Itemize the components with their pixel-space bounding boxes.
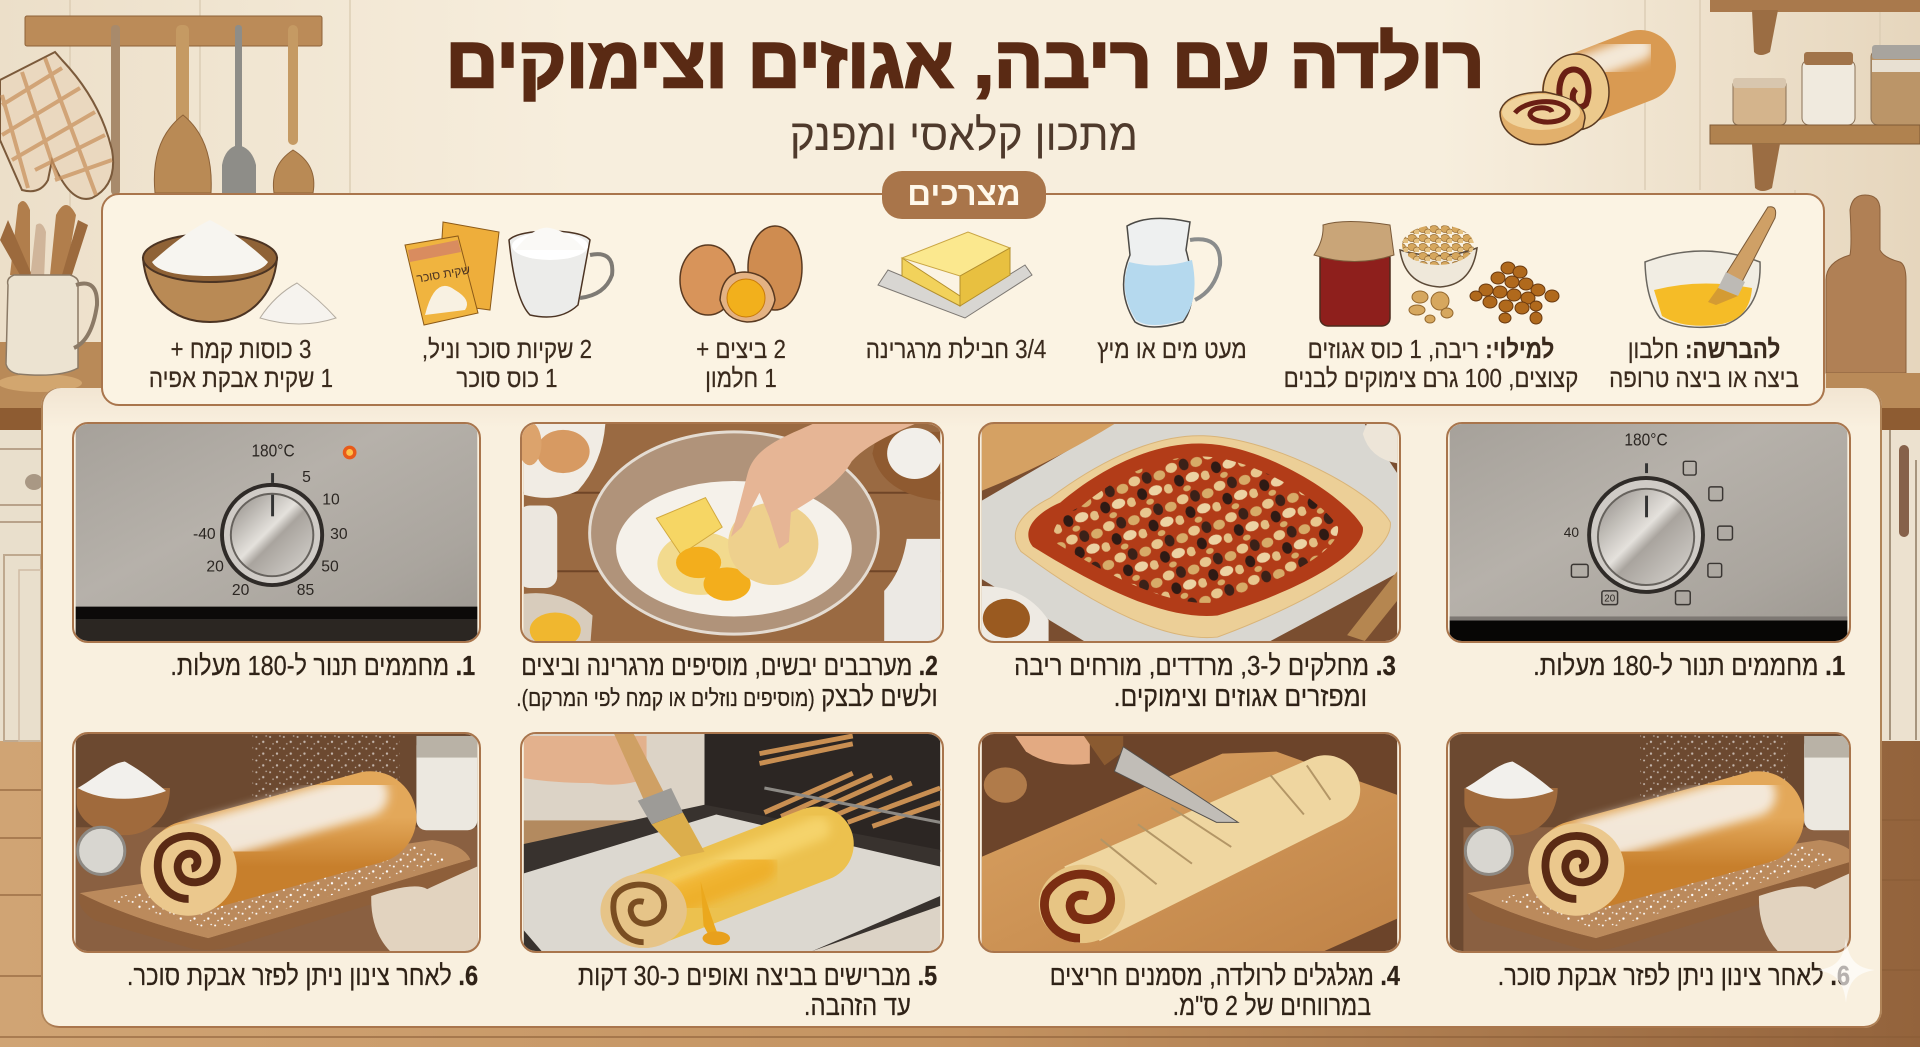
icon: bowl of chopped nuts: [1400, 225, 1477, 287]
floor planks: [0, 790, 1920, 1037]
photo: oven dial with numbers: [72, 422, 481, 643]
step text: 4. מגלגלים לרולדה, מסמנים חריצים: [1050, 960, 1400, 991]
photo: oven dial with numbers: 20: [206, 558, 224, 575]
panel: steps: [41, 388, 1882, 1028]
subtitle: מתכון קלאסי ומפנק: [790, 111, 1138, 160]
jar grain: [1871, 45, 1920, 125]
ingredient text: sugar: 1 כוס סוכר: [456, 363, 558, 393]
photo: scoring the roll with a knife: [978, 732, 1401, 953]
floor: [0, 741, 1920, 1047]
ingredient text: flour: [149, 334, 333, 393]
ingredient text: filling: למילוי: ריבה, 1 כוס אגוזים: [1308, 334, 1554, 364]
spatula: [111, 25, 120, 195]
photo: brushing roll by the oven: [520, 732, 944, 953]
icon: vanilla sugar sachets and cup: [405, 222, 612, 325]
ingredient text: water: מעט מים או מיץ: [1097, 334, 1247, 364]
right counter: [1826, 373, 1920, 430]
icon: sparkle watermark: [1817, 939, 1874, 1002]
photo: dough with jam, nuts and raisins: [978, 422, 1401, 643]
right cabinet: [1882, 430, 1920, 741]
photo: oven dial with numbers: -40: [193, 526, 216, 543]
step 2: mix dough: ולשים לבצק (מוסיפים נוזלים או קמח לפי המרקם).: [517, 681, 938, 712]
title: רולדה עם ריבה, אגוזים וצימוקים: [446, 23, 1485, 103]
ingredient text: flour: 1 שקית אבקת אפיה: [149, 363, 333, 393]
lower shelf: [1710, 125, 1920, 144]
ingredients heading pill: מצרכים: [907, 175, 1021, 212]
step text: 5. מברישים בביצה ואופים כ-30 דקות: [578, 960, 937, 991]
photo: oven dial with symbols: [1446, 422, 1851, 643]
icon: water jug: [1124, 218, 1220, 327]
step text: 6. לאחר צינון ניתן לפזר אבקת סוכר.: [1498, 960, 1850, 991]
oven mitt: [0, 52, 113, 199]
photo: oven dial with numbers: 50: [321, 558, 339, 575]
photo: oven dial with numbers: 10: [322, 492, 340, 509]
hanging rack: [0, 16, 322, 199]
ingredient text: sugar: [422, 334, 592, 393]
step 3: spread filling: [978, 422, 1401, 712]
cutting board: [1826, 195, 1906, 373]
upper bracket: [1752, 10, 1778, 55]
photo: oven dial with numbers: 85: [297, 582, 314, 599]
icon: raisins and walnuts: [1409, 262, 1559, 324]
step 1 left: preheat oven: [72, 422, 481, 681]
ingredient text: filling: קצוצים, 100 גרם צימוקים לבנים: [1284, 363, 1578, 393]
panel: ingredients: [101, 193, 1825, 406]
icon: eggs: [680, 226, 802, 322]
step 2: mix dough: [517, 422, 944, 712]
step text: 3. מחלקים ל-3, מרדדים, מורחים ריבה: [1014, 650, 1396, 681]
photo: oven dial with numbers: 20: [232, 582, 250, 599]
step 5: brush and bake: [520, 732, 944, 1021]
ingredient text: glaze: להברשה: חלבון: [1628, 334, 1780, 364]
photo: oven dial with numbers: 180°C: [251, 440, 295, 460]
ingredient text: eggs: [696, 334, 786, 393]
icon: egg wash bowl and brush: [1645, 207, 1776, 327]
step 5: brush and bake: עד הזהבה.: [804, 990, 911, 1021]
icon: margarine on dish: [878, 232, 1032, 318]
photo: oven dial with symbols: 40: [1564, 525, 1579, 540]
ingredient text: glaze: ביצה או ביצה טרופה: [1609, 363, 1799, 393]
step 3: spread filling: ומפזרים אגוזים וצימוקים.: [1114, 681, 1367, 712]
small wooden spoon: [273, 25, 314, 193]
ingredient icons: [142, 206, 1776, 328]
ingredient text: eggs: 2 ביצים +: [696, 334, 786, 364]
wooden spoon: [154, 25, 211, 193]
ingredient text: margarine: 3/4 חבילת מרגרינה: [866, 334, 1046, 364]
step text: 1. מחממים תנור ל-180 מעלות.: [1533, 650, 1845, 681]
jar small: [1733, 78, 1786, 125]
fork: [222, 25, 256, 195]
ingredient text: flour: 3 כוסות קמח +: [171, 334, 311, 364]
ingredients heading pill: [882, 171, 1046, 219]
ingredient text: sugar: 2 שקיות סוכר וניל,: [422, 334, 592, 364]
ingredient text: eggs: 1 חלמון: [705, 363, 777, 393]
step text: 2. מערבבים יבשים, מוסיפים מרגרינה וביצים: [521, 650, 938, 681]
photo: sugared roll on board: [1446, 732, 1851, 953]
icon: jam jar: [1314, 222, 1394, 326]
step 6 left: dust with sugar: [72, 732, 481, 991]
step 1 right: preheat oven: [1446, 422, 1851, 681]
jar white: [1802, 52, 1855, 125]
left cabinet: [0, 430, 43, 741]
icon: roulade: [1499, 30, 1676, 146]
pitcher with wooden utensils: [0, 201, 97, 375]
photo: sugared roll on board: [72, 732, 481, 953]
ingredient text: glaze: [1609, 334, 1799, 393]
photo: oven dial with numbers: 5: [302, 469, 311, 486]
right shelves: [1710, 0, 1920, 191]
upper shelf: [1710, 0, 1920, 12]
photo: oven dial with symbols: 20: [1604, 594, 1616, 605]
photo: oven dial with numbers: 30: [330, 526, 348, 543]
icon: flour bowl: [143, 220, 336, 324]
wall planks: [70, 0, 1880, 370]
icon: vanilla sugar sachets and cup: שקית סוכר: [415, 262, 471, 286]
step text: 6. לאחר צינון ניתן לפזר אבקת סוכר.: [127, 960, 478, 991]
lower bracket: [1752, 144, 1780, 191]
photo: mixing bowl: [520, 422, 944, 643]
photo: oven dial with symbols: 180°C: [1624, 430, 1668, 450]
ingredient text: filling: [1284, 334, 1578, 393]
step text: 1. מחממים תנור ל-180 מעלות.: [170, 650, 475, 681]
step 6 right: dust with sugar: [1446, 732, 1851, 991]
left counter: [0, 342, 110, 430]
step 4: roll and score: [978, 732, 1401, 1021]
step 4: roll and score: במרווחים של 2 ס"מ.: [1173, 990, 1371, 1021]
